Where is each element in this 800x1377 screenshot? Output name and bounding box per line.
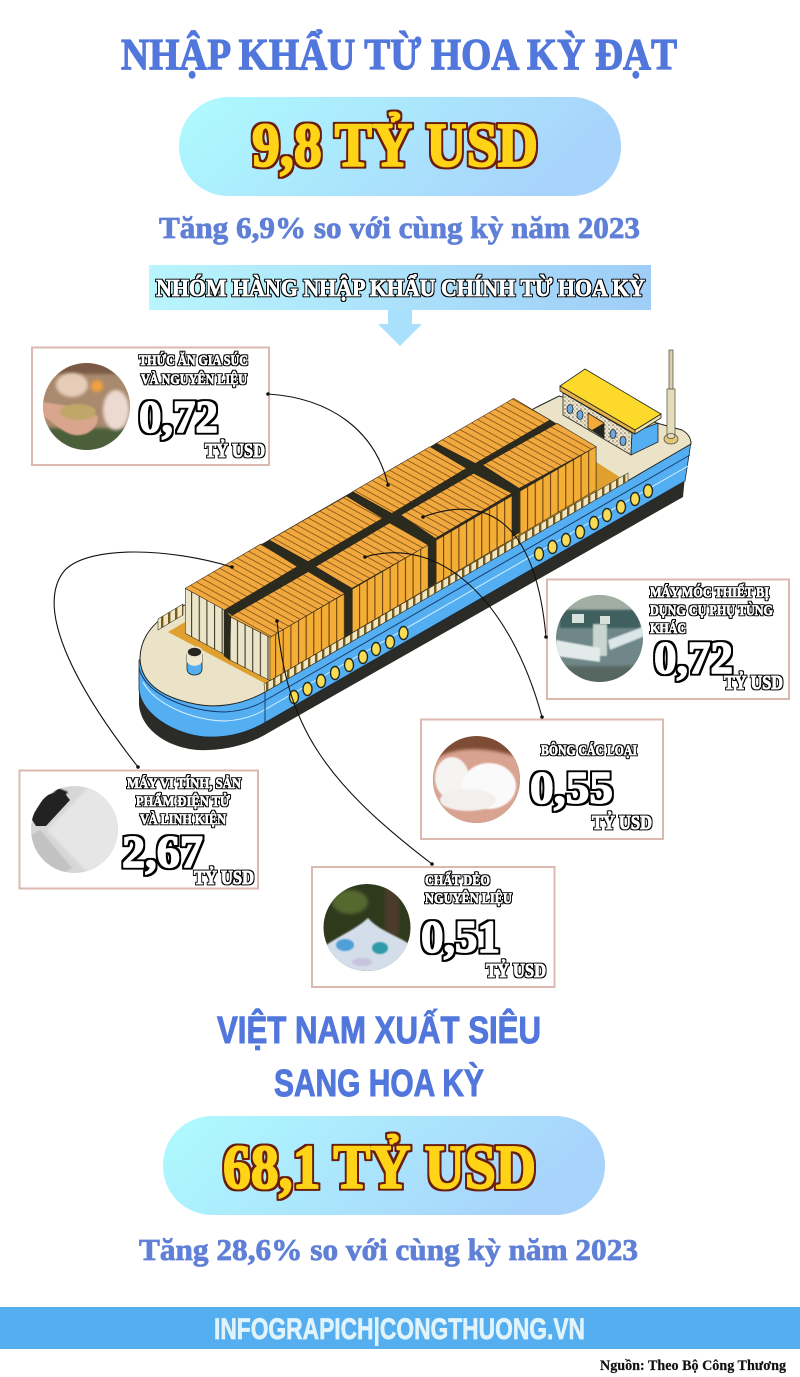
value: 2,67: [122, 827, 203, 877]
pill: surplus value: 68,1 TỶ USD: [223, 1134, 536, 1202]
card: computers and electronics: [20, 770, 258, 889]
label: [650, 584, 773, 637]
label: CHẤT DẺO: [425, 872, 490, 889]
label: [127, 775, 241, 828]
card: cotton: [421, 720, 663, 839]
photo: white device: [30, 785, 120, 876]
unit: TỶ USD: [592, 811, 652, 834]
connector end dots: [136, 392, 548, 866]
label: KHÁC: [650, 620, 686, 637]
card: plastics: [312, 867, 554, 987]
label: [425, 872, 512, 907]
value: 0,72: [654, 633, 733, 683]
photo: factory machines: [555, 594, 645, 684]
deck: [140, 396, 691, 706]
bow railing: [158, 604, 183, 630]
mast: [664, 350, 678, 444]
label: THỨC ĂN GIA SÚC: [139, 352, 248, 369]
photo: cotton in hands: [433, 736, 520, 823]
container block base: [185, 398, 596, 637]
source note: Nguồn: Theo Bộ Công Thương: [600, 1358, 786, 1374]
title: trade surplus: [217, 1008, 541, 1105]
footer bar: [0, 1307, 800, 1349]
label: MÁY MÓC THIẾT BỊ: [650, 584, 769, 601]
photo: plastic bottles: [324, 884, 410, 971]
title: trade surplus: VIỆT NAM XUẤT SIÊU: [217, 1008, 541, 1052]
label: DỤNG CỤ PHỤ TÙNG: [650, 602, 773, 619]
label: NGUYÊN LIỆU: [425, 890, 512, 907]
label: [139, 352, 248, 388]
deck house: [560, 369, 661, 455]
unit: TỶ USD: [486, 959, 546, 982]
card: animal feed: [32, 348, 269, 465]
card: machinery: [547, 580, 789, 699]
container long faces: [270, 447, 596, 681]
portholes: [290, 484, 652, 704]
label: MÁY VI TÍNH, SẢN: [127, 775, 241, 792]
footer bar: INFOGRAPICH|CONGTHUONG.VN: [214, 1313, 585, 1346]
hull: stripes: [139, 455, 690, 722]
unit: TỶ USD: [724, 671, 783, 694]
connector lines: [54, 394, 546, 864]
banner: main import groups: NHÓM HÀNG NHẬP KHẨU CHÍNH TỪ HOA KỲ: [156, 275, 645, 302]
hull: black keel: [139, 465, 686, 750]
gold deck cargo bed: [168, 420, 626, 684]
label: BÔNG CÁC LOẠI: [541, 742, 637, 759]
value: 0,72: [139, 392, 218, 442]
container end faces: [185, 588, 270, 681]
banner: main import groups: [149, 265, 651, 310]
pill: import value: [179, 97, 621, 196]
containers: [185, 398, 596, 681]
bollard: [187, 647, 202, 675]
pill: surplus value: [163, 1116, 605, 1215]
arrow: pointing down to ship: [378, 310, 422, 346]
label: VÀ LINH KIỆN: [140, 811, 226, 828]
roofs: [185, 398, 596, 637]
straps: [345, 488, 520, 638]
title: trade surplus: SANG HOA KỲ: [274, 1061, 484, 1105]
unit: TỶ USD: [194, 866, 254, 889]
value: 0,51: [421, 912, 500, 962]
text: surplus growth: Tăng 28,6% so với cùng kỳ năm 2023: [139, 1232, 638, 1267]
side railing: [264, 473, 628, 692]
title: import headline: NHẬP KHẨU TỪ HOA KỲ ĐẠT: [121, 28, 677, 79]
text: import growth: Tăng 6,9% so với cùng kỳ năm 2023: [159, 210, 640, 245]
value: 0,55: [530, 763, 613, 813]
illustration: cargo ship: [139, 350, 691, 750]
unit: TỶ USD: [205, 439, 265, 462]
photo: piglets and feed: [43, 363, 130, 450]
pill: import value: 9,8 TỶ USD: [252, 112, 538, 180]
label: VÀ NGUYÊN LIỆU: [141, 371, 247, 388]
hull: blue band: [139, 442, 691, 737]
label: PHẨM ĐIỆN TỬ: [136, 792, 230, 810]
